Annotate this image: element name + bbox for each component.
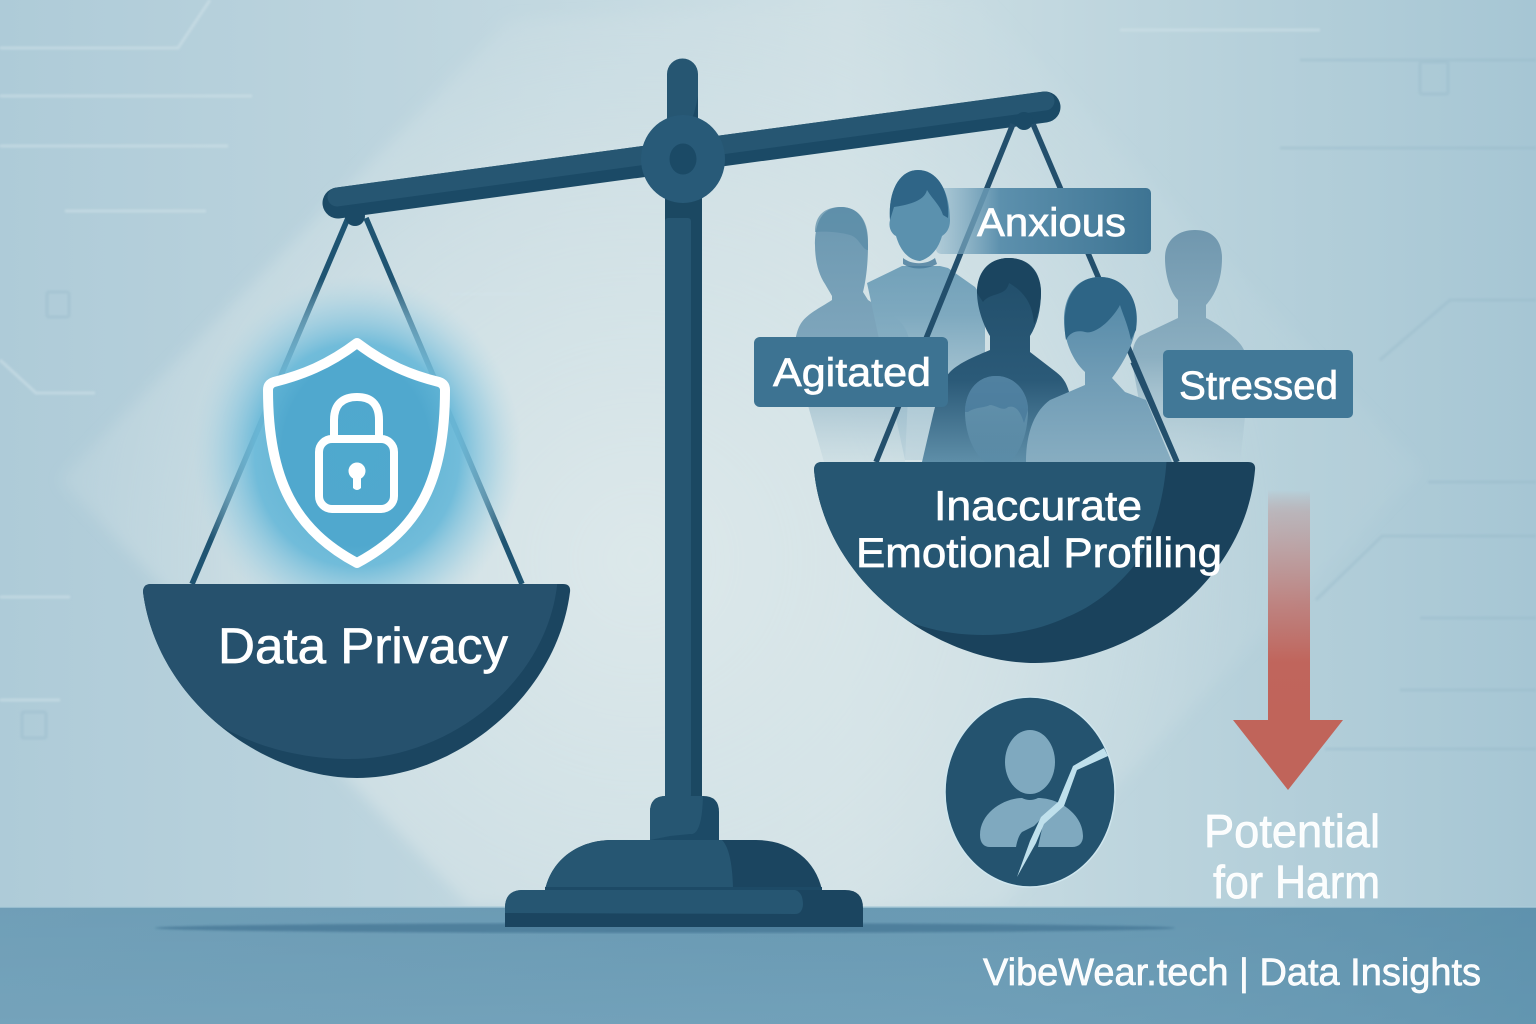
right strings [876,124,1177,462]
base [505,796,863,927]
right pan label: Inaccurate [934,482,1142,529]
footer brand: VibeWear.tech | Data Insights [983,952,1481,994]
post [665,58,702,800]
crack [1017,748,1108,877]
down arrow: potential for harm [1233,490,1343,790]
person: dark centre [922,258,1071,462]
right pan label: Emotional Profiling [856,529,1222,576]
scale stand [505,58,863,927]
privacy glow [192,275,522,635]
right pan [800,450,1255,663]
harm label [1204,805,1380,908]
person: front right [1026,277,1177,462]
left pan [130,575,570,778]
person: back centre head [889,170,950,268]
person: back left [794,207,910,462]
floor band [0,906,1536,1024]
tag: Agitated [754,337,948,407]
floor shadow [155,923,1175,933]
person: small front [965,376,1028,462]
beam [337,101,1045,226]
left strings [192,218,522,584]
tag: Anxious: Anxious [977,201,1126,245]
right pan label [856,482,1222,576]
icon: shield with padlock [268,343,445,563]
person: back centre body [867,266,985,460]
harm label: Potential [1204,805,1380,857]
tag: Stressed [1163,350,1353,418]
left pan label: Data Privacy [218,618,508,674]
right pan load: people, strings and Anxious tag [794,124,1247,462]
icon: padlock [319,397,394,509]
icon: fractured user [945,697,1115,887]
person: back right [1132,230,1247,462]
tag: Anxious [936,188,1151,254]
pivot hub [641,115,725,203]
harm label: for Harm [1213,856,1380,908]
tag: Agitated: Agitated [773,351,931,395]
tag: Stressed: Stressed [1179,364,1338,408]
